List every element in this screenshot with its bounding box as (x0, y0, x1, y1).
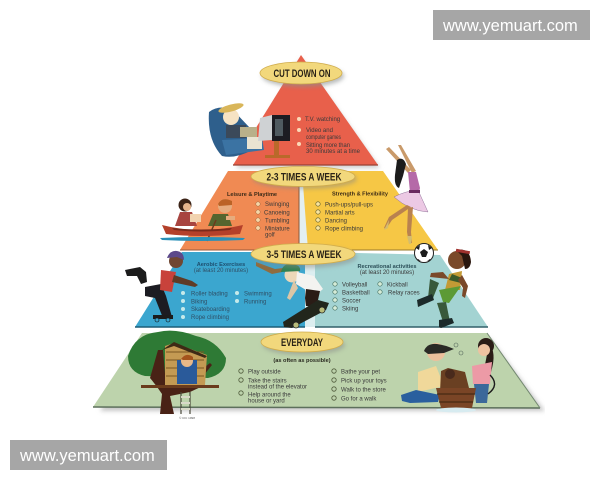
list: recreational items (333, 282, 420, 312)
list: recreational items: Skiing (342, 306, 358, 312)
list: everyday right: Go for a walk (341, 396, 377, 402)
list: aerobic activities: Roller blading (191, 292, 228, 298)
list: leisure activities: Miniature (265, 226, 290, 232)
heading: leisure and playtime: Leisure & Playtime (227, 192, 277, 198)
list: everyday right: Bathe your pet (341, 370, 380, 376)
panel: leisure and playtime (180, 171, 299, 250)
list: recreational items: Relay races (388, 290, 420, 296)
watermark: bottom left (10, 440, 167, 470)
list: sedentary activities: Sitting more than (306, 143, 350, 149)
icon: children bathing dog (401, 338, 495, 412)
list: everyday right: Walk to the store (341, 388, 386, 394)
list: recreational items: Soccer (342, 298, 361, 304)
label: 2-3 times a week (251, 166, 357, 189)
list: aerobic activities: Skateboarding (191, 307, 230, 313)
list: leisure activities: golf (265, 232, 275, 238)
list: everyday right: Pick up your toys (341, 378, 387, 384)
list: everyday right (332, 369, 387, 402)
heading: strength and flexibility: Strength & Flexibility (332, 192, 389, 198)
list: leisure activities: Canoeing (264, 210, 290, 216)
pyramid infographic (93, 55, 545, 420)
panel: everyday (93, 333, 545, 411)
icon: soccer player (417, 249, 471, 328)
label: cut down on: CUT DOWN ON (274, 68, 331, 80)
list: aerobic activities (181, 291, 272, 321)
watermark: top right: www.yemuart.com (442, 17, 578, 35)
heading: aerobic exercises: (at least 20 minutes) (194, 268, 248, 274)
list: everyday left (239, 369, 307, 404)
watermark: bottom left: www.yemuart.com (19, 447, 155, 465)
heading: aerobic exercises (194, 262, 248, 274)
list: sedentary activities (297, 117, 361, 155)
heading: aerobic exercises: Aerobic Exercises (197, 262, 245, 268)
label: everyday: EVERYDAY (281, 337, 323, 349)
list: aerobic activities: Running (244, 300, 266, 306)
panel: strength and flexibility (302, 171, 438, 250)
heading: recreational activities: (at least 20 minutes) (360, 270, 414, 276)
heading: recreational activities (357, 264, 417, 276)
label: 3-5 times a week: 3-5 TIMES A WEEK (266, 249, 342, 261)
list: sedentary activities: 30 minutes at a time (306, 149, 361, 155)
list: everyday left: Play outside (248, 370, 281, 376)
list: recreational items: Kickball (387, 282, 408, 288)
label: cut down on (260, 62, 344, 87)
panel: recreational activities (315, 252, 488, 327)
list: strength activities: Push-ups/pull-ups (325, 202, 373, 208)
list: aerobic activities: Biking (191, 300, 207, 306)
list: strength activities (316, 202, 373, 232)
list: sedentary activities: T.V. watching (305, 117, 340, 123)
list: recreational items: Basketball (342, 290, 370, 296)
list: strength activities: Rope climbing (325, 226, 363, 232)
list: leisure activities (256, 202, 290, 238)
icon: roller blader (125, 251, 198, 322)
panel: gap between tiers (298, 172, 316, 327)
list: aerobic activities: Swimming (244, 292, 272, 298)
list: leisure activities: Tumbling (265, 218, 289, 224)
icon: treehouse (128, 331, 226, 420)
list: strength activities: Martial arts (325, 210, 355, 216)
panel: aerobic exercises (135, 252, 305, 327)
list: sedentary activities: computer games (306, 135, 341, 141)
heading: recreational activities: Recreational activities (357, 264, 417, 270)
list: everyday left: instead of the elevator (248, 384, 307, 390)
panel: cut down on (233, 55, 380, 168)
icon: children in canoe (160, 198, 245, 241)
icon: dancer (384, 145, 428, 244)
list: aerobic activities: Rope climbing (191, 315, 229, 321)
icon: person in armchair watching TV (209, 101, 290, 158)
list: recreational items: Volleyball (342, 282, 367, 288)
label: everyday (261, 332, 345, 355)
list: strength activities: Dancing (325, 218, 347, 224)
icon: skateboarder (256, 262, 329, 328)
watermark: top right (433, 10, 590, 40)
icon: soccer ball (414, 244, 434, 262)
subheading: as often as possible: (as often as possible) (273, 358, 331, 364)
copyright note: © CIC 1998 (179, 416, 195, 420)
label: 2-3 times a week: 2-3 TIMES A WEEK (266, 172, 342, 184)
list: everyday left: Take the stairs (248, 378, 287, 384)
list: sedentary activities: Video and (306, 128, 333, 134)
list: everyday left: Help around the (248, 392, 291, 398)
list: everyday left: house or yard (248, 398, 285, 404)
label: 3-5 times a week (251, 244, 357, 268)
list: leisure activities: Swinging (265, 202, 289, 208)
